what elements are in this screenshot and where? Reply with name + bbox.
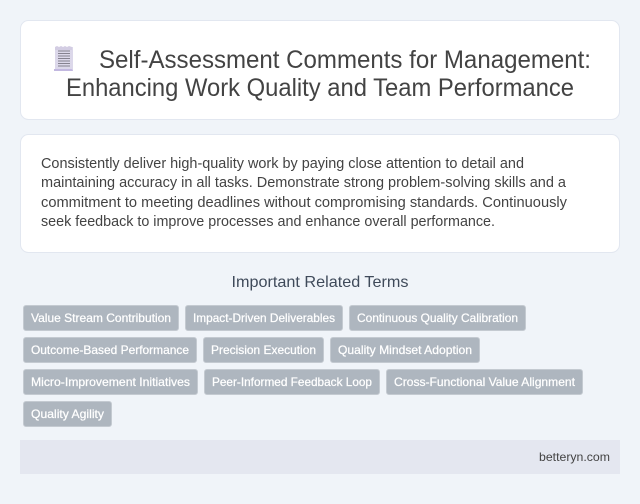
title text: Self-Assessment Comments for Management:: [99, 46, 591, 74]
footer credit: betteryn.com: [539, 450, 610, 464]
tag: Cross-Functional Value Alignment: [394, 375, 576, 389]
tag: [204, 338, 324, 362]
panel: summary: [20, 134, 620, 252]
title text: Enhancing Work Quality and Team Performance: [66, 74, 574, 102]
footer: [20, 440, 620, 474]
tag: Micro-Improvement Initiatives: [31, 375, 190, 389]
icon: document scroll: [54, 46, 73, 71]
summary text: commitment to meeting deadlines without compromising standards. Continuously: [41, 195, 568, 211]
tag: Impact-Driven Deliverables: [193, 311, 335, 325]
summary text: maintaining accuracy in all tasks. Demonstrate strong problem-solving skills and a: [41, 175, 567, 191]
tag: [24, 402, 112, 426]
title text: [66, 46, 591, 102]
tag: Quality Agility: [31, 407, 104, 421]
tag: [350, 306, 526, 330]
tag list: [24, 306, 582, 426]
tag: Outcome-Based Performance: [31, 343, 189, 357]
panel: title: [20, 20, 620, 120]
tag: Peer-Informed Feedback Loop: [212, 375, 372, 389]
tag: [330, 338, 480, 362]
tag: [24, 370, 198, 394]
summary text: [41, 156, 568, 230]
summary text: Consistently deliver high-quality work by paying close attention to detail and: [41, 156, 524, 172]
tag: [386, 370, 582, 394]
tag: Value Stream Contribution: [31, 311, 171, 325]
tag: [24, 306, 178, 330]
tag: Continuous Quality Calibration: [357, 311, 518, 325]
tag: [186, 306, 342, 330]
tag: Precision Execution: [211, 343, 316, 357]
tag: [24, 338, 196, 362]
tag: Quality Mindset Adoption: [338, 343, 472, 357]
heading: related terms: Important Related Terms: [232, 274, 408, 291]
summary text: seek feedback to improve processes and enhance overall performance.: [41, 214, 495, 230]
tag: [204, 370, 380, 394]
